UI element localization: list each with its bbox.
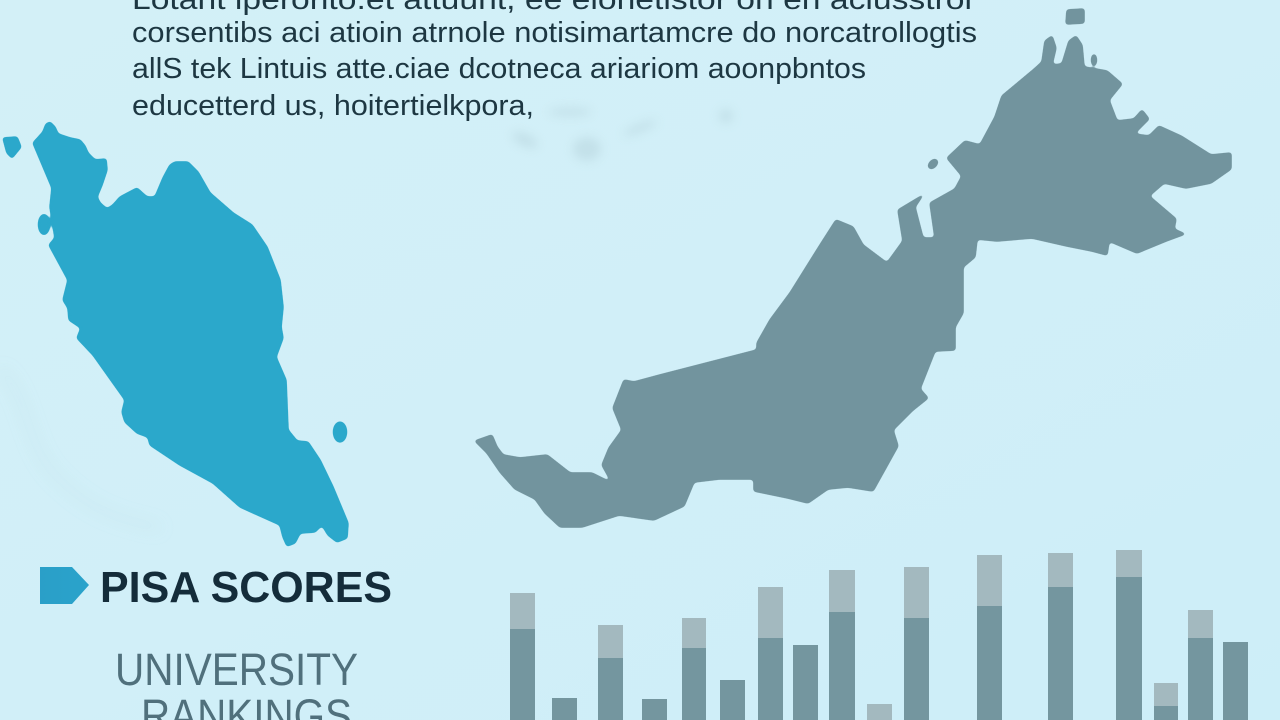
map: peninsular region [3, 122, 348, 546]
map: eastern region [475, 9, 1231, 527]
intro text block: corsentibs aci atioin atrnole notisimartamcre do norcatrollogtis [132, 17, 977, 49]
intro text block [132, 0, 977, 122]
heading: university rankings: UNIVERSITY [115, 644, 358, 695]
heading: university rankings [115, 644, 358, 720]
icon: tag arrow [40, 567, 89, 604]
intro text block: educetterd us, hoitertielkpora, [132, 90, 534, 122]
bar chart [510, 550, 1248, 720]
intro text block: allS tek Lintuis atte.ciae dcotneca ariariom aoonpbntos [132, 53, 866, 85]
heading: PISA scores: PISA SCORES [100, 563, 392, 612]
